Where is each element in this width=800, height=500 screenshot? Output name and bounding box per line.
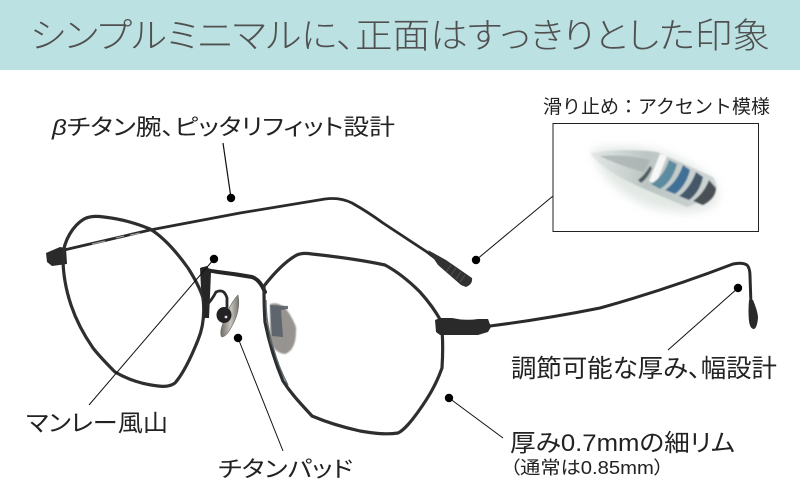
right nose pad xyxy=(270,303,296,354)
label: beta titanium temple: βチタン腕、ピッタリフィット設計 xyxy=(51,115,395,140)
right temple arm xyxy=(490,263,758,329)
inset: accent pattern on temple tip xyxy=(553,124,758,232)
glasses illustration xyxy=(46,198,758,434)
label: anti-slip accent pattern: 滑り止め：アクセント模様 xyxy=(543,96,770,118)
label: titanium pads: チタンパッド xyxy=(218,457,353,482)
label: manley style: マンレー風山 xyxy=(26,410,168,436)
label: adjustable thickness and width: 調節可能な厚み、幅設計 xyxy=(511,355,777,383)
left hinge xyxy=(46,247,67,266)
callout lines and markers xyxy=(89,143,742,451)
right lens rim xyxy=(264,253,443,434)
title banner xyxy=(0,0,800,70)
left lens rim xyxy=(63,216,204,386)
far temple arm xyxy=(64,198,472,287)
bridge xyxy=(203,269,265,292)
title banner: シンプルミニマルに、正面はすっきりとした印象 xyxy=(30,17,770,56)
label: thin rim: 厚み0.7mmの細リム xyxy=(510,430,735,457)
right hinge xyxy=(435,318,491,335)
left nose pad xyxy=(205,291,239,337)
bridge joint xyxy=(200,266,211,318)
label: normal rim thickness note: （通常は0.85mm） xyxy=(510,458,664,478)
